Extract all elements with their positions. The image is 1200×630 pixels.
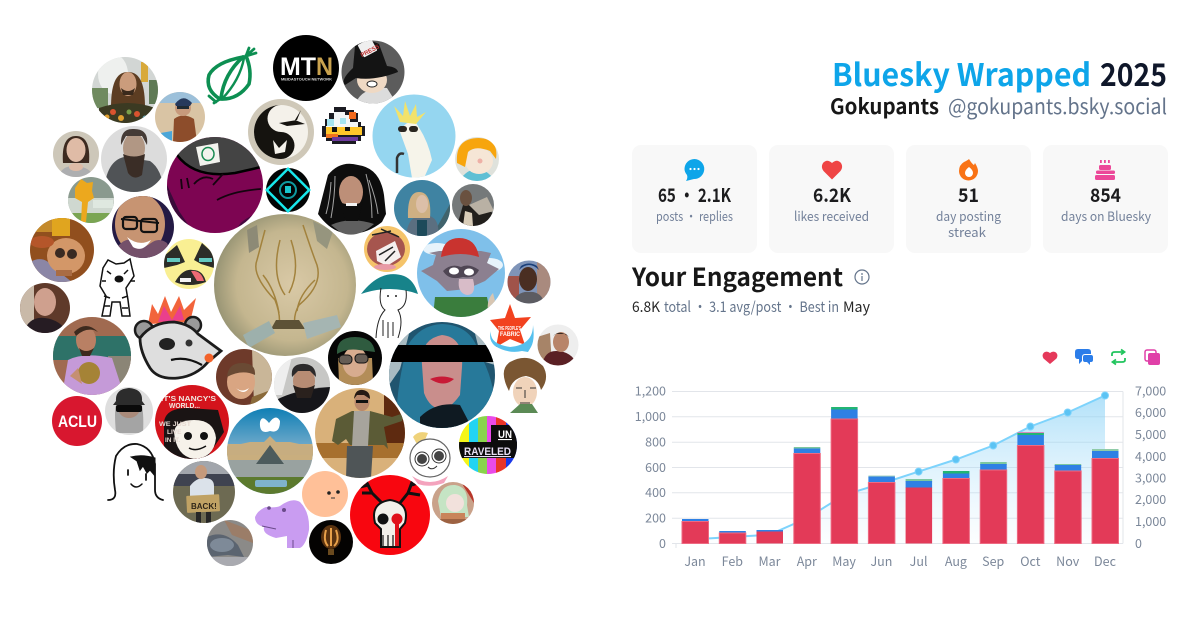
bar: Apr — [794, 447, 820, 544]
month labels: May — [832, 551, 856, 570]
panel: day posting streak: streak — [948, 222, 987, 241]
engagement summary: 6.8K — [632, 296, 661, 317]
avatar: MTN logo: MT — [280, 53, 316, 81]
bars — [682, 407, 1118, 544]
right axis labels: 2,000 — [1135, 489, 1166, 508]
avatar: raccoon with red beanie — [417, 229, 505, 317]
legend icons — [1043, 349, 1160, 365]
panel: day posting streak: day posting — [936, 206, 1002, 225]
icon: replies legend — [1075, 349, 1093, 365]
panel: day posting streak: 51 — [958, 181, 979, 208]
avatar: long hair cartoon man — [318, 164, 386, 235]
avatar: smiling man in seat — [216, 349, 272, 405]
heading: your engagement: Your Engagement — [631, 258, 843, 294]
bar: Nov — [1055, 464, 1081, 544]
avatar: UNRAVELED color bars — [459, 416, 517, 474]
bar: Sep — [980, 462, 1007, 544]
bar: Jan — [682, 519, 708, 544]
cumulative area — [695, 396, 1105, 544]
avatar: mustache man at capitol — [92, 54, 161, 123]
right axis labels — [1135, 380, 1166, 552]
avatar: man drinking coconut — [53, 317, 131, 395]
icon: round white character with big eyes — [410, 432, 450, 486]
icon: heart — [822, 161, 842, 180]
avatar: Nancy's world comic: IT'S NANCY'S — [161, 396, 216, 403]
month labels: Jun — [870, 551, 892, 570]
bar: Mar — [756, 530, 783, 544]
left axis labels: 600 — [645, 457, 666, 476]
icon: info — [855, 270, 869, 284]
icon: line art girl — [108, 444, 163, 500]
avatar: Nancy's world comic: WORLD... — [169, 403, 200, 410]
chart: monthly engagement — [635, 380, 1166, 570]
right axis labels: 7,000 — [1135, 380, 1166, 400]
avatar: teal diamond emblem — [266, 168, 310, 212]
avatar: bearded man black coat — [274, 357, 330, 413]
avatar: bald man — [20, 283, 70, 333]
right axis labels: 4,000 — [1135, 446, 1166, 465]
left axis labels: 400 — [645, 482, 666, 501]
avatar: Nancy's world comic: IN IT. — [165, 437, 180, 444]
title: 2025 — [1100, 50, 1167, 95]
month labels: Oct — [1020, 551, 1041, 570]
avatar: comic man big brown hair — [504, 358, 546, 413]
month labels: Aug — [945, 551, 967, 570]
avatar: purple cartoon with onion hat — [167, 137, 263, 233]
avatar: UNRAVELED color bars: RAVELED — [464, 446, 511, 458]
panel: likes received — [769, 145, 894, 253]
bar: Oct — [1017, 432, 1044, 544]
icon: figure with teal umbrella — [361, 274, 418, 338]
avatar: ACLU logo: ACLU — [58, 412, 97, 431]
avatar: ACLU logo — [52, 396, 102, 446]
bar: Jul — [906, 479, 932, 544]
avatar: protester with sign: BACK! — [191, 502, 217, 511]
user name and handle: @gokupants.bsky.social — [948, 91, 1167, 121]
icon: quotes legend — [1145, 350, 1160, 365]
panel: posts and replies — [632, 145, 757, 253]
avatar: press hat cartoon — [341, 38, 405, 104]
avatar: sun mascot and soccer team — [68, 177, 114, 224]
left axis labels: 200 — [645, 508, 666, 526]
avatar: large praying hands sketch — [214, 214, 356, 356]
icon: purple hippo — [255, 500, 309, 548]
month labels — [684, 551, 1117, 570]
avatar: smiling man with glasses — [112, 194, 174, 258]
icon: mohawk possum sketch — [135, 296, 221, 378]
panel: days on Bluesky: 854 — [1090, 181, 1121, 208]
bar: May — [831, 407, 858, 544]
right axis labels: 6,000 — [1135, 402, 1166, 421]
panel: likes received: 6.2K — [813, 181, 852, 208]
engagement summary: total · 3.1 avg/post · Best in — [664, 296, 839, 317]
panel: days on Bluesky: days on Bluesky — [1061, 206, 1151, 225]
avatar: skull and antlers on red — [350, 475, 430, 555]
panel: likes received: likes received — [794, 206, 869, 225]
bar: Feb — [719, 531, 746, 544]
right axis labels: 0 — [1135, 533, 1142, 552]
left axis labels — [635, 380, 666, 552]
avatar: Louvre with butterfly — [227, 408, 313, 494]
title: Bluesky Wrapped — [832, 50, 1091, 95]
avatar: Nancy's world comic: LIVE — [167, 429, 182, 436]
avatar: blue haired woman with censor bar — [389, 322, 495, 428]
icon: flame — [959, 159, 978, 180]
month labels: Jul — [910, 551, 928, 570]
icon: hobbes sketch — [100, 259, 135, 316]
avatar: MTN logo — [273, 35, 339, 101]
left axis labels: 0 — [659, 533, 666, 552]
icon: the people's fabric star — [490, 304, 534, 352]
right axis labels: 1,000 — [1135, 511, 1166, 530]
right axis labels: 3,000 — [1135, 468, 1166, 486]
panel: posts and replies: 65 · 2.1K — [658, 181, 732, 208]
avatar: man in olive jacket — [315, 388, 405, 478]
left axis labels: 1,000 — [635, 406, 666, 425]
icon: likes legend — [1043, 352, 1057, 364]
avatar: dark portrait man — [452, 184, 494, 226]
avatar: MTN logo: MEIDASTOUCH NETWORK — [281, 76, 332, 82]
avatar: UNRAVELED color bars: UN — [498, 429, 512, 441]
avatar: skull with sunglasses — [30, 218, 94, 282]
month labels: Dec — [1094, 551, 1117, 570]
left axis labels: 800 — [645, 432, 666, 450]
avatar: press hat cartoon: PRESS — [360, 44, 381, 59]
avatar: glowing light bulb — [309, 520, 353, 564]
month labels: Nov — [1056, 551, 1080, 570]
month labels: Sep — [982, 551, 1005, 570]
avatar: cockatoo with sunglasses — [372, 94, 456, 178]
user name and handle — [830, 91, 1167, 121]
cumulative line — [695, 392, 1108, 539]
month labels: Mar — [758, 551, 781, 570]
avatar: dark skinned man — [507, 260, 551, 304]
avatar: peach face — [302, 471, 348, 517]
bar: Jun — [868, 476, 895, 544]
avatar: yellow meme face — [164, 239, 214, 289]
bar: Dec — [1092, 449, 1118, 544]
avatar: yin yang drone and dove — [248, 99, 314, 165]
avatar: bearded man with sunglasses and cap — [105, 387, 153, 435]
icon: the people's fabric star: THE PEOPLE'S — [498, 326, 521, 332]
panel: posts and replies: posts · replies — [656, 206, 733, 225]
avatar: blonde woman in denim — [394, 180, 450, 236]
avatar: red haired cartoon — [364, 226, 410, 272]
avatar: Nancy's world comic — [155, 385, 229, 459]
icon: chat bubble — [684, 159, 704, 181]
avatar: moray eel — [207, 520, 253, 567]
avatar: protester with sign — [173, 461, 235, 523]
avatar cluster — [20, 35, 579, 567]
panel: days on Bluesky — [1043, 145, 1168, 253]
right axis labels: 5,000 — [1135, 424, 1166, 443]
avatar: anime girl with food — [432, 482, 474, 524]
icon: reposts legend — [1112, 350, 1125, 364]
icon: cake — [1095, 160, 1115, 180]
left axis labels: 1,200 — [635, 380, 666, 400]
avatar: beach selfie — [155, 92, 205, 142]
month labels: Feb — [722, 551, 743, 570]
icon: the people's fabric star: FABRIC — [500, 332, 521, 338]
avatar: bearded man grey jacket — [101, 126, 167, 192]
month labels: Apr — [797, 551, 817, 570]
icon: onion logo — [208, 48, 256, 103]
avatar: man in red shirt — [537, 324, 579, 366]
user name and handle: Gokupants — [830, 91, 939, 121]
avatar: woman portrait — [53, 131, 99, 177]
engagement summary: May — [843, 296, 870, 317]
avatar: green cap with glasses — [328, 331, 382, 385]
avatar: Nancy's world comic: WE JUST — [159, 421, 191, 428]
month labels: Jan — [684, 551, 706, 570]
avatar: MTN logo: N — [316, 53, 333, 81]
bar: Aug — [943, 471, 969, 544]
avatar: orange hair cartoon — [455, 137, 499, 181]
panel: day posting streak — [906, 145, 1031, 253]
icon: pixel bird — [322, 107, 365, 144]
